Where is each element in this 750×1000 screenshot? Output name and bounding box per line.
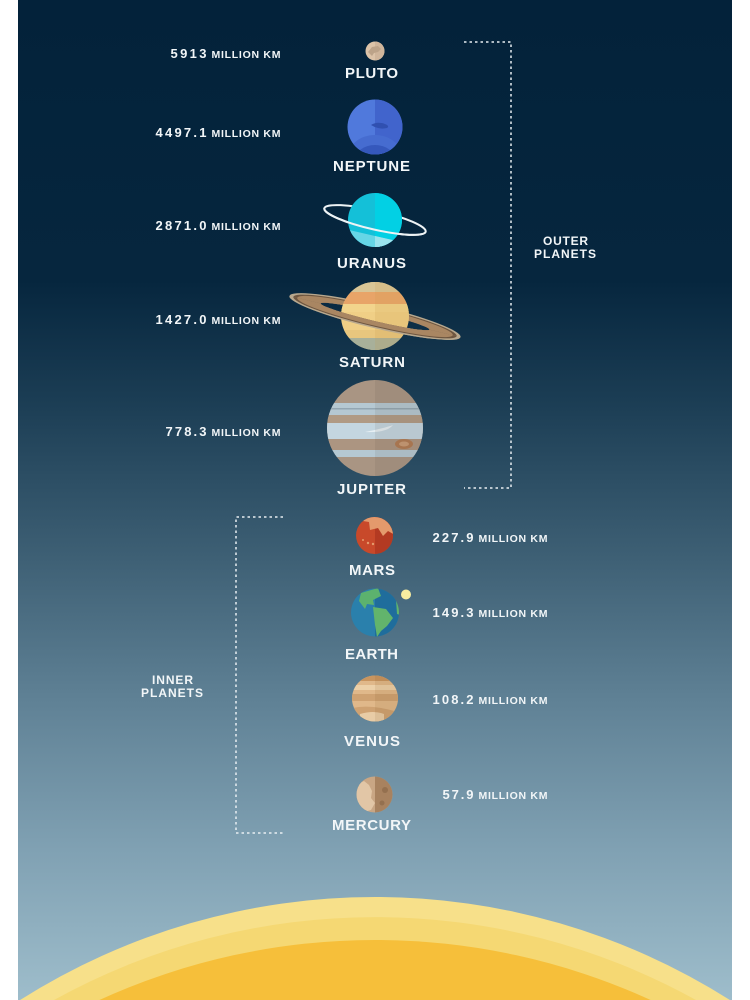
name: uranus: URANUS [337,255,406,272]
planet: jupiter [327,380,423,476]
distance: mars: MILLION KM [478,533,548,545]
name: earth: EARTH [345,646,398,663]
distance: neptune: MILLION KM [212,128,281,140]
planet: neptune [348,100,402,154]
label: inner planets [141,673,203,700]
distance: venus: 108.2 [432,692,474,707]
planet: venus [352,675,398,722]
distance: pluto [170,46,281,61]
label: inner planets: PLANETS [141,686,203,700]
distance: earth [432,605,548,620]
planet: mercury [356,776,393,813]
name: mercury: MERCURY [332,817,411,834]
name: saturn: SATURN [339,354,405,371]
planet: saturn with rings [287,282,463,350]
label: outer planets: PLANETS [534,247,596,261]
distance: mercury [442,787,548,802]
label: outer planets: OUTER [543,234,588,248]
name: neptune: NEPTUNE [333,158,410,175]
distance: jupiter: MILLION KM [212,427,281,439]
distance: venus [432,692,548,707]
distance: venus: MILLION KM [478,695,548,707]
planet: uranus with ring [322,193,428,250]
label: inner planets: INNER [152,673,193,687]
distance: uranus [156,218,281,233]
name: pluto: PLUTO [345,65,398,82]
distance: saturn: MILLION KM [212,315,281,327]
label: outer planets [534,234,596,261]
name: venus: VENUS [344,733,400,750]
bracket: inner planets [236,517,283,833]
sun [20,897,730,1000]
name: mars: MARS [349,562,395,579]
distance: mercury: MILLION KM [478,790,548,802]
distance: neptune: 4497.1 [156,125,206,140]
planet: earth [350,588,400,638]
distance: neptune [156,125,281,140]
distance: pluto: 5913 [170,46,206,61]
distance: pluto: MILLION KM [212,49,281,61]
name: jupiter: JUPITER [337,481,406,498]
distance: mercury: 57.9 [442,787,474,802]
distance: saturn [156,312,281,327]
icon: moon [401,590,411,600]
bracket: outer planets [464,42,511,488]
distance: mars: 227.9 [432,530,474,545]
distance: earth: MILLION KM [478,608,548,620]
distance: saturn: 1427.0 [156,312,206,327]
distance: mars [432,530,548,545]
distance: uranus: MILLION KM [212,221,281,233]
planet: pluto [365,41,385,61]
distance: uranus: 2871.0 [156,218,206,233]
distance: jupiter [166,424,281,439]
planet: mars [356,517,393,554]
distance: earth: 149.3 [432,605,474,620]
distance: jupiter: 778.3 [166,424,206,439]
